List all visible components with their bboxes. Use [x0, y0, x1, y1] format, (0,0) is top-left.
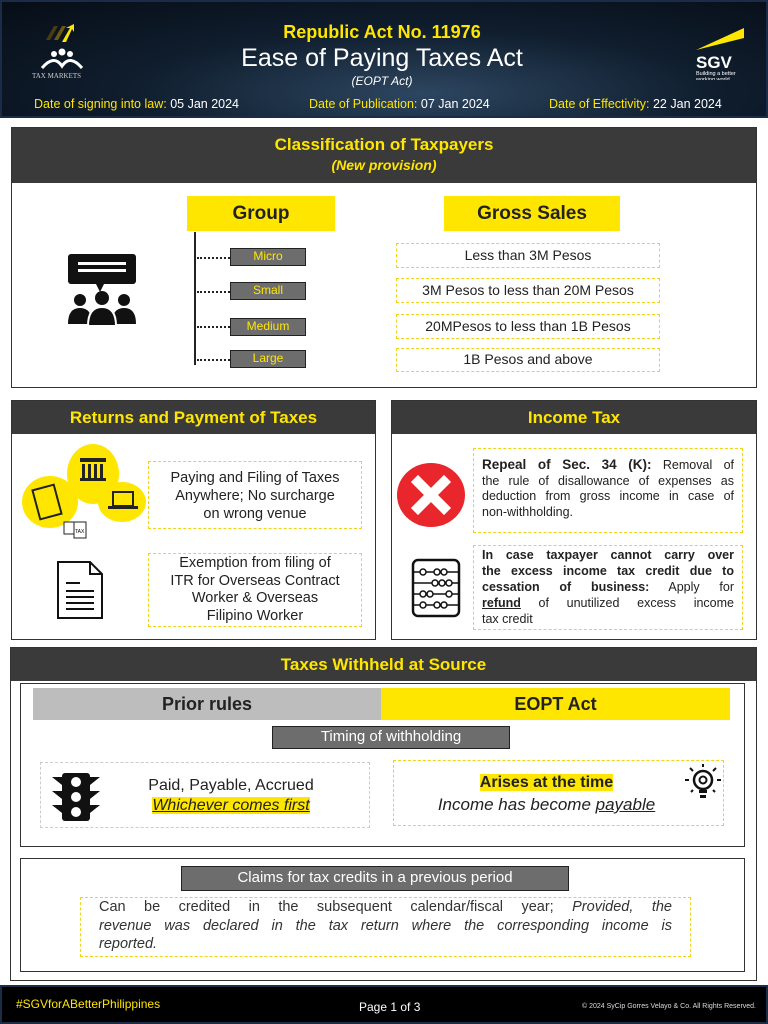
text: exemption: Filipino Worker	[207, 608, 303, 624]
text: refund: refund of unutilized excess income	[482, 596, 734, 610]
logo: tax markets	[32, 24, 83, 80]
title block	[241, 22, 523, 88]
text: paid payable	[148, 777, 314, 814]
panel: returns and payment	[11, 400, 376, 640]
footer: Page 1 of 3	[359, 1000, 420, 1014]
title block: (EOPT Act)	[352, 74, 412, 88]
timing of withholding label	[272, 726, 510, 749]
footer	[0, 985, 768, 1024]
text: arises: Arises at the time	[480, 774, 613, 791]
gross sales heading	[444, 196, 620, 231]
heading: Classification of Taxpayers	[275, 135, 493, 154]
text: Medium	[247, 319, 289, 333]
text: 20MPesos to less than 1B Pesos	[425, 318, 631, 334]
logo: tax markets: TAX MARKETS	[32, 72, 81, 80]
text: arises	[438, 774, 656, 814]
icon: abacus	[412, 558, 460, 618]
group heading: Group	[232, 203, 290, 224]
text: Small	[253, 283, 283, 297]
claims box	[20, 858, 745, 972]
text: paying anywhere: Paying and Filing of Taxes	[170, 470, 340, 486]
heading: Returns and Payment of Taxes	[70, 408, 317, 427]
header banner: Date of Publication: 07 Jan 2024	[309, 97, 490, 111]
prior rules header: Prior rules	[162, 694, 252, 714]
text: repeal: deduction from gross income in case of	[482, 489, 734, 503]
heading	[12, 128, 756, 183]
eopt box	[393, 760, 724, 826]
group labels: Micro	[253, 249, 283, 263]
footer: © 2024 SyCip Gorres Velayo & Co. All Rights Reserved.	[582, 1003, 756, 1010]
text: paying anywhere: on wrong venue	[203, 506, 307, 522]
icon: lightbulb	[685, 764, 721, 798]
text: repeal: non-withholding.	[482, 504, 573, 518]
text: arises: Income has become payable	[438, 795, 655, 814]
text: 1B Pesos and above	[463, 351, 593, 367]
heading	[392, 401, 756, 434]
text: 3M Pesos to less than 20M Pesos	[422, 282, 634, 298]
heading: (New provision)	[331, 157, 436, 173]
logo: SGV: Building a better	[696, 71, 736, 77]
icon: payment anywhere: TAX	[75, 529, 85, 535]
text: paid payable: Whichever comes first	[152, 797, 310, 814]
text: refund: cessation of business: Apply for	[482, 580, 734, 594]
text: paying anywhere	[148, 461, 362, 529]
text: exemption: Worker & Overseas	[192, 590, 318, 606]
claims label: Claims for tax credits in a previous period	[237, 869, 513, 886]
text: Large	[253, 351, 283, 365]
group labels	[230, 248, 306, 266]
tree lines	[194, 232, 196, 365]
prior rule box	[40, 762, 370, 828]
claims text	[80, 897, 691, 957]
claims text: revenue was declared in the tax return where the corresponding income is	[99, 918, 672, 934]
claims text: reported.	[99, 936, 157, 952]
heading	[11, 648, 756, 681]
footer: #SGVforABetterPhilippines	[16, 997, 160, 1011]
panel: taxes withheld at source	[10, 647, 757, 981]
icon: document	[57, 561, 103, 619]
heading: Taxes Withheld at Source	[281, 655, 486, 674]
title block: Ease of Paying Taxes Act	[241, 44, 523, 72]
gross sales heading: Gross Sales	[477, 203, 587, 224]
text: repeal	[473, 448, 743, 533]
text: refund: tax credit	[482, 612, 533, 626]
text: exemption: Exemption from filing of	[179, 555, 331, 571]
icon: red x	[397, 463, 465, 527]
icon: traffic light	[52, 773, 100, 821]
logo: SGV: SGV	[696, 53, 733, 72]
inner box: timing	[20, 683, 745, 847]
icon: payment anywhere	[22, 444, 146, 538]
text: repeal: Repeal of Sec. 34 (K): Removal of	[482, 457, 734, 472]
claims label	[181, 866, 569, 891]
timing of withholding label: Timing of withholding	[321, 728, 461, 745]
group heading	[187, 196, 335, 231]
panel: classification of taxpayers	[11, 127, 757, 388]
text: exemption	[148, 553, 362, 627]
claims text: Can be credited in the subsequent calendar/fiscal year; Provided, the	[99, 899, 672, 915]
text: refund: In case taxpayer cannot carry over	[482, 548, 734, 562]
eopt act header: EOPT Act	[514, 694, 597, 714]
text: refund: the excess income tax credit due to	[482, 564, 734, 578]
dates: Date of signing into law: 05 Jan 2024	[34, 97, 239, 111]
heading	[12, 401, 375, 434]
heading: Income Tax	[528, 408, 620, 427]
gross sales values	[396, 243, 660, 268]
header banner: Date of Effectivity: 22 Jan 2024	[549, 97, 722, 111]
gross sales values: Less than 3M Pesos	[465, 247, 591, 263]
prior rules header	[33, 688, 381, 720]
text: repeal: the rule of disallowance of expenses as	[482, 474, 734, 488]
text: refund	[473, 545, 743, 630]
text: exemption: ITR for Overseas Contract	[170, 572, 340, 588]
title block: Republic Act No. 11976	[283, 22, 481, 42]
icon: group discussion	[68, 254, 136, 325]
panel: income tax	[391, 400, 757, 640]
text: paying anywhere: Anywhere; No surcharge	[175, 488, 335, 504]
eopt act header	[381, 688, 730, 720]
logo: SGV	[695, 28, 744, 80]
text: paid payable: Paid, Payable, Accrued	[148, 777, 314, 794]
header banner	[0, 0, 768, 118]
